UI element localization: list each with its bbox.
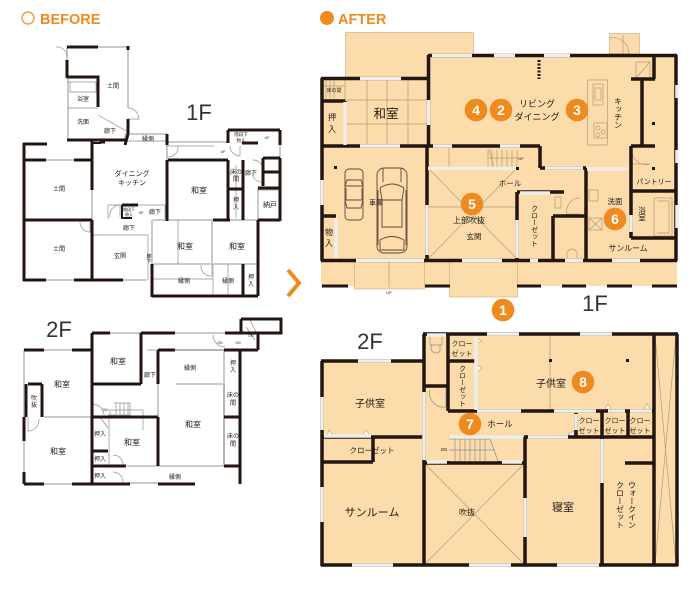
numbered marker 6: 6 <box>611 211 619 227</box>
plan: before 1F: 洗面 <box>77 118 89 126</box>
plan: before 1F: 物入 <box>236 137 246 144</box>
plan: before 1F: UP <box>139 211 144 215</box>
heading: after: AFTER <box>338 12 387 28</box>
plan: after 2F: 子供室 <box>355 397 385 410</box>
car: large <box>377 168 407 253</box>
dashed post column <box>538 60 540 79</box>
thin fixtures: void, stairs, beam <box>327 335 676 564</box>
plan: before 1F: 階段下 <box>234 131 248 138</box>
plan: before 1F: 廊下 <box>104 127 116 135</box>
plan: after 2F: サンルーム <box>345 506 399 519</box>
plan: after 1F: クローゼット <box>530 205 538 247</box>
label: before 1F: 1F <box>186 100 212 125</box>
plan: before 2F: 押 <box>230 359 236 367</box>
plan: before 1F: 和室 <box>177 241 193 251</box>
plan: before 1F: 和室 <box>229 241 245 251</box>
plan: before 2F: 和室 <box>110 356 126 366</box>
windows <box>322 56 677 260</box>
plan: after 1F <box>321 32 677 297</box>
heading: after <box>320 11 387 28</box>
plan: before 1F: 押 <box>233 196 239 204</box>
plan: after 2F: ゼット <box>630 426 650 435</box>
plan: before 1F: 縁側 <box>178 277 190 285</box>
plan: before 1F: 物入 <box>125 211 133 217</box>
plan: after 1F: 車庫 <box>369 198 383 207</box>
numbered marker 7 <box>459 413 481 435</box>
plan: before 2F: DN <box>248 334 254 338</box>
plan: before 1F: 下 <box>146 259 152 265</box>
plan: before 2F: 廊下 <box>144 371 156 379</box>
numbered marker 2: 2 <box>497 102 505 118</box>
plan: before 1F: 和室 <box>191 185 207 195</box>
car: small <box>345 169 363 220</box>
numbered marker 4 <box>465 99 487 121</box>
plan: after 2F: クロー <box>578 417 600 425</box>
plan: after 1F: UP <box>386 290 392 295</box>
plan: after 1F: 玄関 <box>466 231 482 241</box>
windows <box>322 334 652 565</box>
numbered marker 1: 1 <box>499 302 507 318</box>
plan: after 2F: 寝室 <box>552 501 574 514</box>
plan: before 1F: キッチン <box>118 179 146 187</box>
plan: after 1F: パントリー <box>636 178 672 186</box>
heading: before: BEFORE <box>40 12 101 28</box>
plan: before 1F: UP <box>221 150 226 154</box>
walls <box>321 334 678 566</box>
plan: before 2F: 和室 <box>54 379 70 389</box>
label: after 1F: 1F <box>582 291 608 316</box>
plan: before 1F: 入 <box>248 281 254 288</box>
plan: after 2F: ゼット <box>578 426 600 435</box>
plan: before 1F: 廊下 <box>123 224 135 232</box>
posts <box>447 359 629 464</box>
plan: after 1F: 洗面 <box>608 196 623 206</box>
plan: before 2F: DN <box>102 408 108 412</box>
plan: before 2F: 縁側 <box>169 473 181 481</box>
plan: after 1F: 浴室 <box>637 205 646 222</box>
plan: after 2F: ゼット <box>452 349 472 358</box>
plan: after 1F: 和室 <box>373 107 399 121</box>
plan: before 2F: 間 <box>230 400 236 407</box>
plan: after 2F: 子供室 <box>536 377 566 390</box>
numbered marker 5: 5 <box>468 196 476 212</box>
numbered marker 8 <box>572 371 594 393</box>
plan: before 2F: 床の <box>227 433 239 440</box>
plan: after 1F: キッチン <box>614 97 622 129</box>
plan: before 1F: 廊下 <box>149 208 161 216</box>
plan: after 1F: サンルーム <box>609 244 648 253</box>
plan: before 1F: 土間 <box>107 82 119 90</box>
plan: after 1F: 物 <box>325 227 333 237</box>
numbered marker 8: 8 <box>579 374 587 390</box>
numbered marker 2 <box>490 99 512 121</box>
numbered marker 1 <box>492 299 514 321</box>
plan: after 1F: ダイニング <box>514 111 560 122</box>
numbered marker 3: 3 <box>573 102 581 118</box>
plan: before 1F: 玄関 <box>114 252 126 260</box>
plan: before 2F: DN <box>235 341 241 345</box>
numbered marker 7: 7 <box>466 416 474 432</box>
plan: after 2F: クローゼット <box>616 481 624 529</box>
plan: before 2F: 和室 <box>124 437 140 447</box>
plan: before 2F: DN <box>217 341 223 345</box>
numbered marker 5 <box>461 193 483 215</box>
plan: after 1F: 押 <box>328 112 336 122</box>
arrow: before to after <box>288 270 299 296</box>
plan: after 1F: 床の間 <box>326 88 342 94</box>
plan: before 2F: 抜 <box>31 401 37 409</box>
plan: before 2F: 押入 <box>94 472 106 480</box>
thin fixtures: tatami, kitchen, stairs, atrium <box>322 35 672 287</box>
plan: before 1F: 階段下 <box>123 206 135 212</box>
terraces and floor fill <box>321 32 677 297</box>
plan: before 2F: 押入 <box>94 455 106 463</box>
plan: before 1F: 土間 <box>53 185 65 193</box>
plan: before 2F <box>24 319 281 484</box>
plan: after 2F: クローゼット <box>350 445 394 455</box>
plan: after 2F: DN <box>441 447 447 452</box>
plan: after 1F: 上部吹抜 <box>453 215 485 225</box>
plan: before 2F: 和室 <box>185 419 201 429</box>
plan: after 1F: 入 <box>325 239 333 248</box>
plan: before 1F: 押 <box>248 273 254 281</box>
plan: after 2F <box>321 334 678 566</box>
plan: before 1F: ダイニング <box>114 169 150 178</box>
plan: before 1F: 間 <box>233 176 239 183</box>
floor fill <box>321 334 678 566</box>
plan: after 2F: クローゼット <box>458 365 466 407</box>
plan: after 1F: ホール <box>499 179 522 188</box>
plan: after 2F: クロー <box>604 417 626 425</box>
numbered marker 4: 4 <box>472 102 480 118</box>
plan: before 1F: 廊下 <box>245 169 257 177</box>
exterior dashes <box>322 284 677 288</box>
plan: after 1F: UP <box>518 156 524 161</box>
plan: after 2F: ゼット <box>604 426 626 435</box>
plan: before 1F: 廊 <box>146 253 152 260</box>
plan: before 1F: 浴室 <box>77 95 89 103</box>
plan: before 2F: 縁側 <box>184 364 196 372</box>
plan: before 1F: 縁側 <box>142 135 154 143</box>
plan: before 1F: UP <box>265 136 270 140</box>
plan: before 1F: 入 <box>233 204 239 211</box>
plan: before 1F: 土間 <box>53 245 65 253</box>
plan: after 2F: クロー <box>452 340 472 348</box>
plan: before 1F <box>23 46 280 297</box>
numbered marker 3 <box>566 99 588 121</box>
plan: after 2F: 吹抜 <box>459 507 475 517</box>
plan: after 2F: ホール <box>487 419 513 429</box>
plan: after 1F: リビング <box>519 98 555 109</box>
plan: before 2F: 和室 <box>50 446 66 456</box>
plan: before 2F: 間 <box>230 441 236 448</box>
walls <box>321 55 677 261</box>
label: before 2F: 2F <box>46 317 72 342</box>
plan: before 1F: 納戸 <box>263 200 277 209</box>
label: after 2F: 2F <box>357 329 383 354</box>
plan: after 2F: ウォークイン <box>628 481 636 529</box>
plan: before 2F: 入 <box>230 367 236 374</box>
plan: before 2F: 床の <box>227 392 239 399</box>
numbered marker 6 <box>604 208 626 230</box>
plan: before 2F: 吹 <box>31 394 37 402</box>
plan: before 1F: 床の <box>230 169 242 176</box>
plan: after 2F: クロー <box>630 417 650 425</box>
posts <box>334 122 655 170</box>
plan: after 1F: 入 <box>328 125 336 134</box>
plan: before 1F: 縁側 <box>222 277 234 285</box>
plan: before 2F: 押入 <box>94 430 106 438</box>
